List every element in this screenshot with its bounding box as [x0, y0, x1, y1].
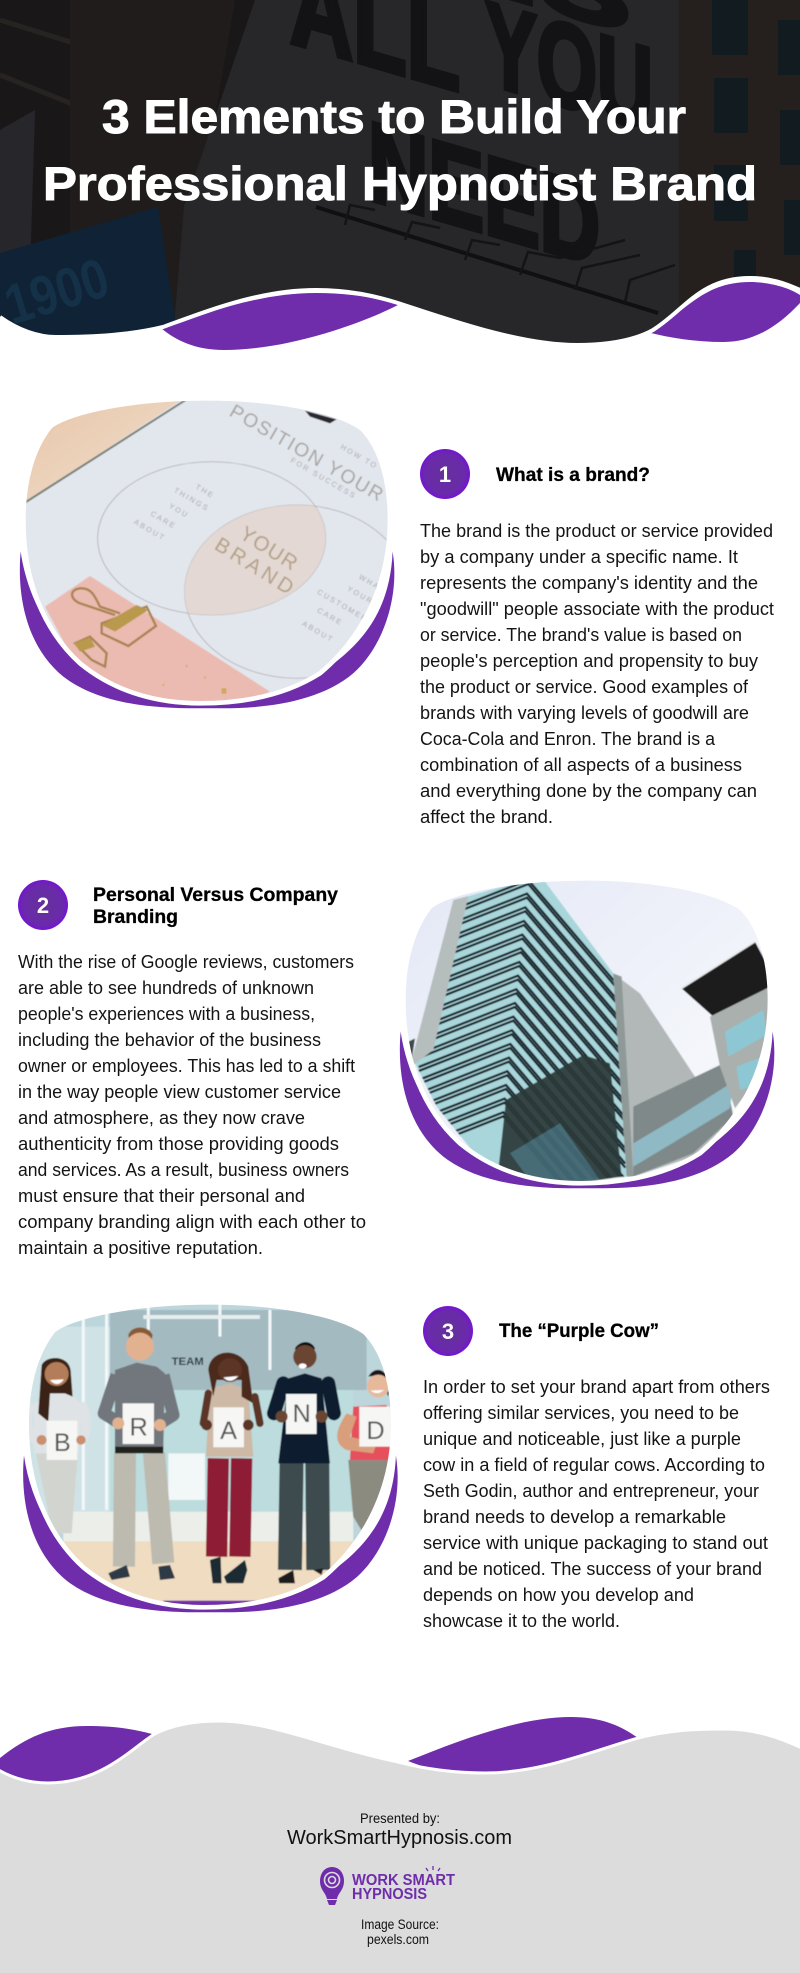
letter cards	[47, 1394, 392, 1460]
photo: your brand document	[26, 400, 388, 701]
purple crescent 1	[20, 552, 394, 708]
text block: what is a brand: The brand is the product or service provided	[420, 521, 773, 541]
photo: glass office tower	[406, 880, 768, 1181]
text block: personal versus company branding: people's experiences with a business,	[18, 1004, 315, 1024]
badge 2	[18, 880, 68, 930]
text block: what is a brand: affect the brand.	[420, 807, 553, 827]
photo: your brand document: CUSTOMERS	[316, 587, 376, 627]
footer purple wave accents	[0, 1717, 638, 1785]
person 3	[203, 1353, 260, 1583]
text block: what is a brand: and everything done by the company can	[420, 781, 757, 801]
logo: work smart hypnosis: HYPNOSIS	[352, 1886, 427, 1903]
photo outline	[27, 1302, 393, 1607]
photo: people holding brand letters: TEAM	[172, 1356, 204, 1368]
text block: personal versus company branding: maintain a positive reputation.	[18, 1238, 263, 1258]
text block: what is a brand: people's perception and propensity to buy	[420, 651, 758, 671]
title	[43, 90, 757, 210]
photo: your brand document: THE	[194, 482, 216, 500]
letter cards: A	[220, 1417, 237, 1445]
photo: your brand document: YOUR	[236, 522, 302, 575]
photo: your brand document: POSITION YOUR	[226, 401, 386, 506]
text block: what is a brand: combination of all aspects of a business	[420, 755, 742, 775]
photo: your brand document: HOW TO	[339, 442, 380, 471]
header photo background: billboard	[0, 0, 800, 350]
text block: what is a brand: the product or service. Good examples of	[420, 677, 749, 697]
person 2	[104, 1327, 175, 1580]
badge 1	[420, 449, 470, 499]
text block: personal versus company branding: With the rise of Google reviews, customers	[18, 952, 354, 972]
text block: what is a brand	[420, 521, 774, 827]
heading: personal versus company branding: Personal Versus Company	[93, 884, 338, 906]
photo outline	[23, 398, 390, 703]
photo: your brand document: THINGS	[172, 486, 211, 513]
text block: the purple cow: unique and noticeable, just like a purple	[423, 1429, 741, 1449]
text block: what is a brand: by a company under a specific name. It	[420, 547, 738, 567]
hands	[37, 1411, 328, 1445]
text block: personal versus company branding: in the way people view customer service	[18, 1082, 341, 1102]
text block: what is a brand: represents the company's identity and the	[420, 573, 758, 593]
letter cards: B	[54, 1429, 71, 1457]
badge 2: 2	[37, 893, 49, 918]
panel: brand team photo	[20, 1297, 400, 1614]
text block: the purple cow: offering similar services, you need to be	[423, 1403, 739, 1423]
text block: the purple cow: In order to set your brand apart from others	[423, 1377, 770, 1397]
text block: personal versus company branding: including the behavior of the business	[18, 1030, 321, 1050]
photo: your brand document: CARE	[149, 509, 178, 531]
website: WorkSmartHypnosis.com	[287, 1827, 512, 1849]
text block: personal versus company branding: authenticity from those providing goods	[18, 1134, 339, 1154]
text block: what is a brand: brands with varying levels of goodwill are	[420, 703, 749, 723]
heading: the purple cow: The “Purple Cow”	[499, 1320, 659, 1342]
panel: what is a brand photo	[20, 397, 409, 710]
badge 3: 3	[442, 1319, 454, 1344]
text block: personal versus company branding	[18, 952, 366, 1258]
letter cards: R	[129, 1413, 148, 1441]
photo: your brand document: WHAT	[357, 572, 387, 595]
text block: what is a brand: "goodwill" people associate with the product	[420, 599, 774, 619]
text block: the purple cow: and be noticed. The success of your brand	[423, 1559, 762, 1579]
text block: the purple cow: brand needs to develop a remarkable	[423, 1507, 726, 1527]
header photo background: billboard: NEED	[368, 99, 600, 290]
header wave outline	[0, 278, 800, 345]
title: 3 Elements to Build Your	[102, 90, 686, 143]
photo: people holding brand letters	[20, 1297, 400, 1614]
photo: your brand document: YOU	[167, 501, 191, 520]
badge 3	[423, 1306, 473, 1356]
text block: the purple cow: Seth Godin, author and entrepreneur, your	[423, 1481, 759, 1501]
heading: personal versus company branding	[93, 884, 338, 928]
person 5	[337, 1370, 392, 1533]
image source: Image Source:	[361, 1917, 439, 1932]
title: Professional Hypnotist Brand	[43, 157, 757, 210]
text block: personal versus company branding: owner or employees. This has led to a shift	[18, 1056, 355, 1076]
photo outline	[403, 878, 770, 1183]
logo: work smart hypnosis: WORK SMART	[352, 1872, 455, 1889]
heading: what is a brand: What is a brand?	[496, 464, 650, 486]
photo: your brand document: FOR SUCCESS	[289, 456, 358, 501]
logo: work smart hypnosis	[320, 1866, 455, 1905]
person 1	[27, 1358, 86, 1533]
text block: the purple cow: cow in a field of regular cows. According to	[423, 1455, 765, 1475]
photo: your brand document: CARE	[316, 606, 345, 628]
person 4	[274, 1342, 334, 1583]
purple crescent 2	[400, 1032, 774, 1188]
footer panel	[0, 1721, 800, 1973]
letter cards: N	[292, 1400, 311, 1428]
purple crescent 3	[23, 1456, 398, 1612]
text block: personal versus company branding: company branding align with each other to	[18, 1212, 366, 1232]
photo: your brand document: ABOUT	[132, 517, 167, 543]
text block: the purple cow: service with unique packaging to stand out	[423, 1533, 768, 1553]
header purple wave accents	[161, 282, 800, 350]
text block: personal versus company branding: must ensure that their personal and	[18, 1186, 305, 1206]
text block: personal versus company branding: are able to see hundreds of unknown	[18, 978, 314, 998]
photo: your brand document: YOUR	[346, 584, 375, 606]
badge 1: 1	[439, 462, 451, 487]
photo: your brand document: ABOUT	[301, 619, 336, 644]
presented by: Presented by:	[360, 1811, 440, 1826]
image source	[361, 1917, 439, 1947]
text block: the purple cow: showcase it to the world.	[423, 1611, 620, 1631]
header photo background: billboard: 1900	[0, 246, 116, 336]
text block: personal versus company branding: and atmosphere, as they now crave	[18, 1108, 305, 1128]
text block: the purple cow	[423, 1377, 770, 1631]
text block: the purple cow: depends on how you develop and	[423, 1585, 694, 1605]
text block: what is a brand: Coca-Cola and Enron. The brand is a	[420, 729, 716, 749]
letter cards: D	[366, 1417, 385, 1445]
icon: spiral light bulb	[320, 1867, 344, 1905]
photo: your brand document: BRAND	[211, 533, 298, 599]
heading: personal versus company branding: Branding	[93, 906, 178, 928]
image source: pexels.com	[367, 1932, 429, 1947]
text block: personal versus company branding: and services. As a result, business owners	[18, 1160, 349, 1180]
panel: company building photo	[400, 880, 774, 1188]
text block: what is a brand: or service. The brand's value is based on	[420, 625, 742, 645]
